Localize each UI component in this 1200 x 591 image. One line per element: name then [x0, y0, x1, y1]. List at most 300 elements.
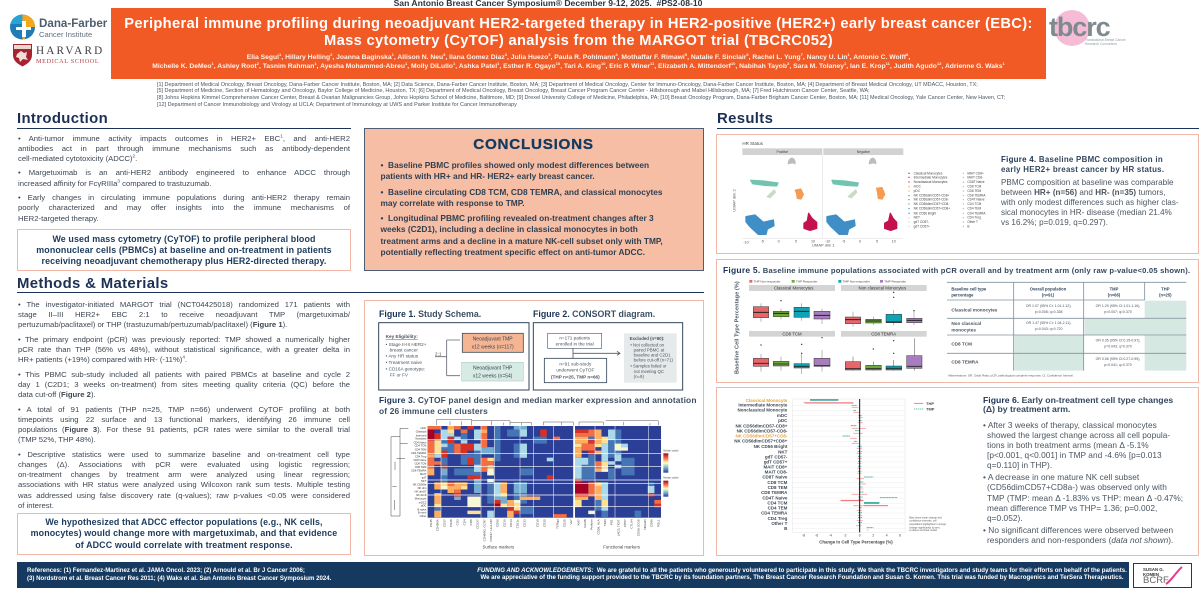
- heatmap row labels: CD4 TEMRA: [411, 451, 427, 455]
- text: methods bullets: • This PBMC sub-study included all patients with paired PBMCs at baseline and cycle 2: [18, 370, 350, 379]
- box plot: classical monocytes: [753, 300, 830, 324]
- panel: figure 4: [716, 134, 1199, 254]
- figure 4 body: sical monocytes in HR- disease (median 21.4%: [1001, 208, 1172, 217]
- callout: study aim: [17, 229, 351, 271]
- text: conclusions bullets: treatment arms and a decline in a mature NK-cell subset only with TMP,: [380, 236, 663, 246]
- figure 6: cell type change chart: [734, 398, 947, 545]
- authors: Elia Segul1, Hillary Helling2, Joanna Baginska1, Allison N. Neu3, Ilana Gomez Diaz3, Julia Huezo3, Paula R. Pohlmann4, Mothaffar F. Rimawi5, Natalie F. Sinclair6, Rachel L. Yung7, Nancy U. Lin1, Antonio C. Wolff8,: [247, 51, 910, 60]
- x-axis: -6: [815, 534, 818, 538]
- figure 2: consort diagram: baseline and C2D1: [634, 353, 671, 358]
- figure 6 bullets: (CD56dimCD57+CD8a-) was observed only with: [987, 482, 1167, 492]
- figure 3: heatmap: Median scaled: [663, 450, 679, 452]
- heatmap column labels: CD38, HLA: [596, 519, 600, 535]
- UMAP legend: MAIT CD8-: [967, 175, 983, 179]
- UMAP legend: NK CD56dimCD57-CD8-: [914, 198, 949, 202]
- facet strips: [749, 285, 927, 337]
- logo: Harvard Medical School: MEDICAL SCHOOL: [36, 58, 99, 64]
- legend: [749, 279, 906, 283]
- UMAP legend: B: [967, 224, 969, 228]
- chart note: [909, 516, 947, 532]
- heatmap column labels: CD11c: [516, 519, 520, 528]
- heading: Methods & Materials: Methods & Materials: [17, 276, 168, 292]
- row labels: MAIT CD8+: [763, 464, 788, 469]
- text: figure 4 caption: [1001, 155, 1179, 227]
- figure 2: consort diagram: not meeting QC: [634, 369, 664, 374]
- table odds ratios: p=0.007; q=0.370: [1104, 310, 1132, 314]
- row labels: CD4T Naive: [762, 495, 788, 500]
- figure 6 bullets: q=0.052).: [987, 513, 1023, 523]
- figure 2: consort diagram: • Samples failed or: [630, 364, 667, 369]
- references: [27, 567, 331, 582]
- heatmap column labels: Ki67: [576, 519, 580, 525]
- heatmap row labels: CD4 Treg: [415, 454, 427, 458]
- table headers: Baseline cell type: [951, 286, 987, 291]
- heatmap row labels: gdT: [422, 476, 427, 480]
- heatmap column labels: TIM3: [603, 519, 607, 526]
- figure 1: study schema: FF or FV: [390, 373, 409, 378]
- panel: figure 5: [716, 259, 1199, 383]
- UMAP legend: NK CD56dimCD57+CD8-: [914, 202, 949, 206]
- figure 4 body: [1001, 178, 1179, 227]
- text: methods bullets: [18, 300, 350, 510]
- heatmap row labels: Nonclass: [415, 437, 427, 441]
- funding and acknowledgements: We are appreciative of the funding support provided to the TBCRC by its foundation partners, The Breast Cancer Research Foundation and Susan G. Komen. This trial was funded by Macrogenics and TerSera Therapeutics.: [480, 574, 1124, 581]
- logo: BCRF: KOMEN: [1143, 572, 1159, 577]
- heatmap column labels: CD197, HLA-DR: [489, 519, 493, 542]
- heatmap column labels: CD16: [502, 519, 506, 527]
- heatmap row labels: NKT: [421, 479, 427, 483]
- y-axis title: Baseline Cell Type Percentage (%): [735, 281, 741, 374]
- box plot: CD8 TCM: [753, 337, 830, 374]
- heatmap column labels: CD33: [522, 519, 526, 527]
- heatmap row labels: mDC: [420, 426, 426, 430]
- heatmap column labels: CD25: [562, 519, 566, 527]
- heatmap column labels: CD45: [429, 519, 433, 527]
- logo: Dana-Farber Cancer Institute: Dana-Farber: [39, 16, 107, 30]
- row labels: [734, 398, 788, 531]
- table odds ratios: OR 0.35 (95% CI:0.15-0.97),: [1096, 338, 1140, 342]
- figure 6 bullets: • After 3 weeks of therapy, classical monocytes: [983, 420, 1157, 430]
- UMAP legend: Classical Monocytes: [914, 171, 943, 175]
- figure 6: cell type change chart: Change in Cell Type Percentage (%): [819, 540, 893, 545]
- poster title: Peripheral immune profiling during neoadjuvant HER2-targeted therapy in HER2-positive (HER2+) early breast cancer (EBC):: [124, 16, 1033, 32]
- heatmap column labels: CD56: [496, 519, 500, 527]
- funding and acknowledgements: FUNDING AND ACKNOWLEDGEMENTS: We are grateful to all the patients who generously volunteered to participate in this study. We thank the TBCRC investigators and study teams for their efforts on behalf of the patients.: [477, 566, 1127, 574]
- text: methods bullets: on-treatment changes by treatment arm were analyzed using linear regression;: [18, 470, 350, 479]
- text: introduction bullets: • Anti-tumor immune activity impacts outcomes in HER2+ EBC1, and anti-HER2: [18, 133, 350, 142]
- figure 4: UMAP by HR status: -5: [761, 240, 764, 244]
- figure 4: UMAP by HR status: -10: [825, 240, 830, 244]
- text: conclusions bullets: • Baseline circulating CD8 TCM, CD8 TEMRA, and classical monocytes: [380, 187, 663, 197]
- row labels: NK CD56dimCD57-CD8+: [735, 423, 788, 428]
- figure 4 body: with only modest differences such as higher clas-: [1001, 198, 1179, 207]
- logo: Harvard Medical School: [13, 44, 104, 66]
- figure 5: box plots: CD8 TCM: [782, 331, 802, 336]
- table headers: percentage: [951, 292, 974, 297]
- references: (3) Nordstrom et al. Breast Cancer Res 2011; (4) Waks et al. San Antonio Breast Cancer Symposium 2024.: [27, 575, 331, 582]
- figure 6 bullets: q=0.110] in THP).: [987, 460, 1052, 470]
- callout: hypothesis: of ADCC would correlate with treatment response.: [75, 540, 293, 550]
- text: methods bullets: timepoints using 22 surface and 13 functional markers, identifying 26 immune cell: [18, 415, 350, 424]
- figure 6 bullets: [983, 420, 1183, 545]
- row labels: CD8 TEM: [768, 485, 788, 490]
- text: conclusions bullets: [380, 160, 663, 257]
- figure 4: UMAP by HR status: Positive: [777, 150, 788, 154]
- callout: study aim: receiving neoadjuvant chemotherapy plus HER2-directed therapy.: [42, 256, 326, 266]
- heatmap column labels: CD19: [536, 519, 540, 527]
- table odds ratios: [1026, 304, 1140, 367]
- text: methods bullets: of interest.: [18, 501, 54, 510]
- heatmap column labels: PDL1: [656, 519, 660, 527]
- heatmap column labels: [429, 519, 660, 542]
- heatmap row labels: mDC2: [419, 500, 427, 504]
- text: introduction bullets: cell-mediated cytotoxicity (ADCC)2.: [18, 153, 137, 163]
- poster title: Mass cytometry (CyTOF) analysis from the MARGOT trial (TBCRC052): [324, 33, 833, 49]
- text: figure 6 caption: [983, 394, 1183, 545]
- legend: THP Responder: [796, 279, 817, 283]
- heatmap column labels: CD14: [509, 519, 513, 527]
- row labels: CD4 TEM: [768, 505, 788, 510]
- logo: BCRF: SUSAN G.: [1143, 567, 1164, 572]
- heatmap row labels: CD8 TEMRA: [411, 468, 427, 472]
- footer band: [17, 562, 1129, 588]
- affiliations: [5] Department of Medicine, Section of Hematology and Oncology, Baylor College of Medicine, Houston, TX; [6] Department of Medical Oncology, Breast Oncology, Breast Cancer Program Cancer Center - Hillsborough and Mabel Hillsborough, MA; [7] Fred Hutchinson Cancer Center, Seattle, WA;: [157, 88, 870, 94]
- UMAP: HR- clusters: [827, 158, 897, 234]
- text: introduction bullets: increased affinity for FcγRIIIa3 compared to trastuzumab.: [18, 178, 211, 188]
- row labels: NK CD56dimCD57+CD8-: [735, 434, 788, 439]
- row labels: NK CD56 Bright: [754, 444, 788, 449]
- figure 2: consort diagram: • Not collected on: [630, 342, 665, 347]
- row labels: CD8 TCM: [767, 480, 788, 485]
- zero line: [858, 399, 861, 532]
- table row labels: Non classical: [951, 321, 981, 326]
- UMAP legend: CD8T Naive: [967, 180, 985, 184]
- x-axis: 2: [872, 534, 874, 538]
- x-axis: -8: [802, 534, 805, 538]
- figure 1: study schema: Neoadjuvant THP: [473, 365, 513, 371]
- heatmap row labels: CD4 Naive: [413, 440, 427, 444]
- row labels: CD4 TCM: [767, 501, 788, 506]
- table headers: THP: [1161, 286, 1170, 291]
- row labels: CD8 TEMRA: [761, 490, 788, 495]
- heatmap column labels: CD4: [462, 519, 466, 525]
- dendrograms: [437, 419, 658, 425]
- heatmap row labels: CD4 TEM: [415, 447, 426, 451]
- figure 5: box plots: [734, 279, 927, 374]
- heatmap column labels: CD45RO, CCR7: [482, 519, 486, 541]
- figure 1: study schema: • Any HR status: [386, 353, 419, 358]
- authors: Michelle K. DeMeo1, Ashley Root2, Tasnim Rahman1, Ayesha Mohammed-Abreu1, Molly DiLullo1, Ashka Patel1, Esther R. Ogayo10, Tari A. King10, Eric P. Winer11, Elizabeth A. Mittendorf10, Nabihah Tayob2, Sara M. Tolaney1, Ian E. Krop11, Judith Agudo12, Adrienne G. Waks1: [152, 60, 1005, 70]
- panel: figures 1-3: [364, 300, 704, 556]
- figure 2: consort diagram: [532, 322, 684, 390]
- figure 4: UMAP by HR status: 10: [811, 240, 815, 244]
- heading: figure 2: Figure 2. CONSORT diagram.: [533, 309, 655, 319]
- affiliations: [157, 82, 1005, 108]
- table headers: (n=91): [1042, 292, 1055, 297]
- panel: conclusions: [364, 128, 704, 271]
- row labels: NK CD56dimCD57+CD8+: [734, 439, 788, 444]
- heatmap column labels: CD3: [456, 519, 460, 525]
- x-axis: 6: [899, 534, 901, 538]
- heatmap row labels: NK dim: [418, 486, 427, 490]
- row labels: gdT CD57-: [765, 454, 788, 459]
- heatmap row labels: CD8 TCM: [415, 461, 426, 465]
- heatmap column labels: CD20: [542, 519, 546, 527]
- figure 6 bullets: tions in both treatment arms (mean Δ -5.1%: [987, 440, 1149, 450]
- heatmap column labels: Va7: [569, 519, 573, 524]
- figure 2: consort diagram: underwent CyTOF: [556, 368, 594, 373]
- heatmap column labels: Perforin: [590, 519, 594, 530]
- heatmap column labels: CD86: [650, 519, 654, 527]
- callout: study aim: We used mass cytometry (CyTOF) to profile peripheral blood: [52, 234, 316, 244]
- figure 4 body: between HR+ (n=56) and HR- (n=35) tumors,: [1001, 188, 1166, 197]
- figure 6 bullets: • A decrease in one mature NK cell subset: [983, 472, 1139, 482]
- table odds ratios: OR 1.47 (95% CI: 1.04-2.11),: [1026, 321, 1071, 325]
- figure 2: consort diagram: before cut-off (n=71): [634, 358, 673, 363]
- UMAP legend: NK CD56dimCD57+CD8+: [914, 207, 950, 211]
- affiliations: [12] Department of Cancer Immunobiology and Virology at UCLA; Department of Immunology at UWS and Parker Institute for Cancer Immunotherapy: [157, 102, 517, 108]
- heatmap: surface markers: [428, 426, 573, 518]
- figure 1: study schema: x12 weeks (n=117): [472, 345, 514, 351]
- UMAP legend: CD8 TEMRA: [967, 194, 986, 198]
- text: methods bullets: • Descriptive statistics were used to summarize baseline and on-treatment cell type: [18, 450, 350, 459]
- figure 4 body: vs 16.2%; p=0.019, q=0.297).: [1001, 218, 1108, 227]
- text: conclusions bullets: may correlate with response to TMP.: [380, 198, 525, 208]
- heatmap column labels: PD1: [610, 519, 614, 525]
- text: methods bullets: (TMP 52%, THP 48%).: [18, 435, 96, 444]
- table headers: Overall population: [1030, 286, 1067, 291]
- heading: figure 1: Figure 1. Study Schema.: [379, 309, 481, 319]
- heatmap column labels: CD57: [623, 519, 627, 527]
- UMAP legend: CD4 TEM: [967, 207, 982, 211]
- table odds ratios: OR 1.07 (95% CI: 1.01-1.12),: [1026, 304, 1072, 308]
- heatmap column labels: CD27: [442, 519, 446, 527]
- UMAP: HR+ clusters: [746, 158, 817, 234]
- table shading: [1014, 301, 1186, 371]
- x-axis: 4: [886, 534, 888, 538]
- legend: THP Non-responder: [754, 279, 780, 283]
- title banner: [111, 8, 1046, 79]
- figure 4 body: PBMC composition at baseline was comparable: [1001, 178, 1174, 187]
- row labels: B: [784, 526, 788, 531]
- chart note: change significantly by arm;: [909, 526, 940, 529]
- figure 3: heatmap: [390, 419, 679, 549]
- TMP changes: [810, 400, 897, 528]
- table odds ratios: p=0.043; q=0.370: [1104, 344, 1132, 348]
- row labels: Classical Monocyte: [746, 398, 788, 403]
- heatmap column labels: CD45RA: [436, 519, 440, 531]
- legend: TMP: [926, 407, 935, 412]
- heading: figure 5: Figure 5. Baseline immune populations associated with pCR overall and by treatment arm (only raw p-value<0.05 shown).: [723, 265, 1190, 275]
- heading: figure 3: of 26 immune cell clusters: [379, 406, 488, 416]
- UMAP legend: gdT CD57-: [914, 220, 929, 224]
- text: conclusions bullets: potentially reflecting treatment specific effect on anti-tumor ADCC.: [380, 247, 645, 257]
- figure 4: UMAP by HR status: -5: [842, 240, 845, 244]
- text: methods bullets: associations with HR status were analyzed using Wilcoxon rank sum tests. Multiple testing: [18, 480, 350, 489]
- figure 2: consort diagram: n=171 patients: [559, 335, 591, 340]
- figure 4: UMAP by HR status: 5: [795, 240, 797, 244]
- heatmap row labels: B naive: [417, 507, 427, 511]
- heatmap row labels: Monocyte: [415, 497, 427, 501]
- figure 1: study schema: 2:1: [435, 351, 442, 356]
- text: conclusions bullets: weeks (C2D1), including a decline in classical monocytes in both: [380, 224, 638, 234]
- UMAP legend: NK CD56 Bright: [914, 211, 936, 215]
- text: introduction bullets: antibodies act in part through immune mechanisms such as antibody-dependent: [18, 144, 350, 153]
- table odds ratios: p=0.041; q=0.370: [1104, 363, 1132, 367]
- heatmap row labels: Intermed: [416, 433, 427, 437]
- figure 6 heading: [983, 394, 1173, 414]
- table odds ratios: OR 1.29 (95% CI:1.01-1.16),: [1096, 304, 1140, 308]
- legend: TMP Non-responder: [843, 279, 870, 283]
- text: methods bullets: stage II–III HER2+ EBC 2:1 to receive neoadjuvant TMP (margetuximab/: [18, 310, 350, 319]
- callout: hypothesis: monocytes) would change more with margetuximab, and that evidence: [31, 528, 337, 538]
- text: conclusions bullets: • Baseline PBMC profiles showed only modest differences between: [380, 160, 649, 170]
- figure 4: UMAP by HR status: 0: [778, 240, 780, 244]
- figure 1: study schema: [378, 322, 530, 390]
- poster title: [124, 16, 1033, 49]
- figure 6 bullets: • No significant differences were observed between: [983, 525, 1173, 535]
- figure 1: study schema: • Stage II-III HER2+: [386, 342, 427, 347]
- text: methods bullets: • The investigator-initiated MARGOT trial (NCT04425018) randomized 171 patients with: [18, 300, 350, 309]
- affiliations: [8] Johns Hopkins Kimmel Comprehensive Cancer Center, Breast & Ovarian Malignancies Group, Johns Hopkins School of Medicine, Baltimore, MD; [9] Drexel University College of Medicine, Philadelphia, PA; [10] Breast Oncology Program, Dana-Farber Brigham Cancer Center, Boston, MA; [11] Medical Oncology, Yale Cancer Center, New Haven, CT;: [157, 95, 1005, 101]
- figure 4 heading: early HER2+ breast cancer by HR status.: [1001, 165, 1164, 174]
- figure 2: consort diagram: n=91 sub-study: [559, 362, 592, 367]
- heatmap column labels: CD127: [476, 519, 480, 529]
- row labels: CD4 TEMRA: [761, 510, 788, 515]
- figure 2: consort diagram: (THP n=25, TMP n=66): [551, 374, 600, 379]
- figure 6 heading: (Δ) by treatment arm.: [983, 404, 1070, 414]
- callout: hypothesis: [17, 513, 351, 555]
- figure 6 bullets: showed the largest change across all cell popula-: [987, 430, 1170, 440]
- text: methods bullets: HR+ patients (+19%) compared with HR- (-11%)4.: [18, 355, 187, 364]
- UMAP legend: CD4 TCM: [967, 202, 982, 206]
- row labels: CD4 Treg: [768, 516, 788, 521]
- text: methods bullets: pCR rate than THP (56% vs 48%), without statistical significance, with a greater delta in: [18, 345, 350, 354]
- row labels: Nonclassical Monocyte: [738, 408, 788, 413]
- UMAP legend: NK CD56dimCD57-CD8+: [914, 194, 950, 198]
- heatmap row labels: Other: [420, 514, 426, 518]
- heading: Results: Results: [717, 111, 773, 127]
- table headers: (n=66): [1108, 292, 1121, 297]
- text: methods bullets: was addressed using false discovery rate (q-values); raw p-values <0.05 were considered: [18, 491, 350, 500]
- figure 2: consort diagram: enrolled in the trial: [556, 341, 594, 346]
- box plot: nonclassical monocytes: [845, 292, 922, 327]
- heatmap axis labels: Surface markers: [482, 544, 514, 549]
- figure 4: UMAP by HR status: 10: [892, 240, 896, 244]
- figure 2: consort diagram: (n=9): [634, 374, 644, 379]
- legend: THP: [926, 401, 934, 406]
- table row labels: [951, 308, 998, 364]
- heatmap column labels: GzmB: [583, 519, 587, 528]
- UMAP legend: Nonclassical Monocytes: [914, 180, 948, 184]
- table headers: TMP: [1110, 286, 1119, 291]
- figure 6 bullets: TMP (TMP: mean Δ -1.83% vs THP: mean Δ -0.47%;: [987, 493, 1183, 503]
- UMAP legend: gdT CD57+: [914, 224, 930, 228]
- heading: figure 3: Figure 3. CyTOF panel design and median marker expression and annotation: [379, 395, 697, 405]
- text: methods bullets: populations (Figure 3). For these 91 patients, pCR rates were similar to the overall trial: [18, 425, 350, 434]
- text: methods bullets: data cut-off (Figure 2).: [18, 390, 96, 399]
- heatmap row labels: CD8 Naive: [413, 458, 427, 462]
- authors: [152, 51, 1005, 70]
- UMAP legend: Intermediate Monocytes: [914, 175, 948, 179]
- table headers: (n=25): [1159, 292, 1172, 297]
- heatmap row labels: NK dim57: [415, 490, 427, 494]
- callout: hypothesis: We hypothesized that ADCC effector populations (e.g., NK cells,: [45, 517, 323, 527]
- UMAP legend: [908, 171, 986, 228]
- text: introduction bullets: [18, 133, 350, 223]
- text: conclusions bullets: patients with HR+ and HR- HER2+ early breast cancer.: [380, 171, 595, 181]
- figure 4: UMAP by HR status: UMAP dim 1: [812, 243, 835, 248]
- heatmap column labels: NKG2D: [643, 519, 647, 530]
- heading: Introduction: Introduction: [17, 111, 108, 127]
- table odds ratios: p=0.043; q=0.720: [1035, 327, 1062, 331]
- figure 1: study schema: Neoadjuvant TMP: [473, 337, 513, 343]
- text: introduction bullets: poorly characterized and may offer insights into the immune mechanisms of: [18, 203, 350, 212]
- heatmap row labels: [411, 426, 427, 518]
- heatmap column labels: CD69, ICOS: [636, 519, 640, 536]
- UMAP legend: CD4 TEMRA: [967, 211, 986, 215]
- chart note: confidence intervals; cell: [909, 520, 937, 523]
- logo: Dana-Farber Cancer Institute: [10, 14, 108, 40]
- logo: TBCRC: tbcrc: [1049, 12, 1110, 42]
- chart note: p-values via linear model: [909, 529, 937, 532]
- row labels: MAIT CD8-: [765, 469, 788, 474]
- funding and acknowledgements: [477, 566, 1127, 581]
- text: methods bullets: changes (Δ). Associations with pCR were evaluated using logistic regression;: [18, 460, 350, 469]
- logo: Harvard Medical School: HARVARD: [36, 44, 104, 56]
- row labels: Other T: [771, 521, 788, 526]
- row labels: CD8T Naive: [762, 475, 788, 480]
- text: methods bullets: pertuzumab/paclitaxel) or THP (trastuzumab/pertuzumab/paclitaxel) (Figure 1).: [18, 320, 287, 329]
- figure 5: box plots: Non classical Monocytes: [859, 286, 906, 291]
- figure 1: study schema: • CD16A genotype:: [386, 367, 425, 372]
- legend: TMP Responder: [884, 279, 906, 283]
- figure 5: box plots: CD8 TEMRA: [871, 331, 896, 336]
- x-axis: [802, 534, 901, 538]
- row labels: gdT CD57+: [764, 459, 788, 464]
- heatmap row labels: B mem: [418, 511, 427, 515]
- logo: BCRF: BCRF: [1143, 575, 1169, 586]
- row labels: pDC: [778, 418, 788, 423]
- heading: conclusions: CONCLUSIONS: [473, 136, 594, 153]
- UMAP legend: pDC: [914, 189, 921, 193]
- UMAP legend: MAIT CD8+: [967, 171, 984, 175]
- figure 4: UMAP by HR status: 5: [876, 240, 878, 244]
- figure 4 heading: Figure 4. Baseline PBMC composition in: [1001, 155, 1163, 164]
- figure 1: study schema: • Treatment naive: [386, 360, 422, 365]
- figure 4: UMAP by HR status: UMAP dim 2: [731, 189, 736, 212]
- heatmap row labels: CD8 TEM: [415, 465, 426, 469]
- figure 4: UMAP by HR status: -10: [743, 240, 749, 244]
- figure 6 bullets: [p<0.001, q<0.001] in TMP and -4.6% [p=0.013: [987, 450, 1162, 460]
- heatmap column labels: LAG3, TIGIT: [616, 519, 620, 536]
- legend: [914, 401, 935, 412]
- figure 1: study schema: Key Eligibility:: [386, 334, 418, 339]
- figure 2: consort diagram: paired PBMC at: [634, 348, 665, 353]
- figure 3: heatmap: Median scaled: [663, 478, 679, 480]
- THP changes: [803, 403, 888, 530]
- UMAP legend: CD4 Treg: [967, 216, 981, 220]
- figure 3: heatmap: Functional markers: [603, 544, 640, 549]
- heatmap separators: [428, 439, 661, 507]
- table row labels: CD8 TCM: [951, 342, 972, 347]
- figure 6 bullets: mean difference TMP vs THP= 1.36; p=0.002,: [987, 503, 1157, 513]
- UMAP legend: CD8 TCM: [967, 185, 982, 189]
- UMAP legend: CD4T Naive: [967, 198, 985, 202]
- heatmap column labels: CTLA4: [630, 519, 634, 529]
- chart note: Bars show mean change and: [909, 516, 942, 519]
- row labels: NKT: [778, 449, 788, 454]
